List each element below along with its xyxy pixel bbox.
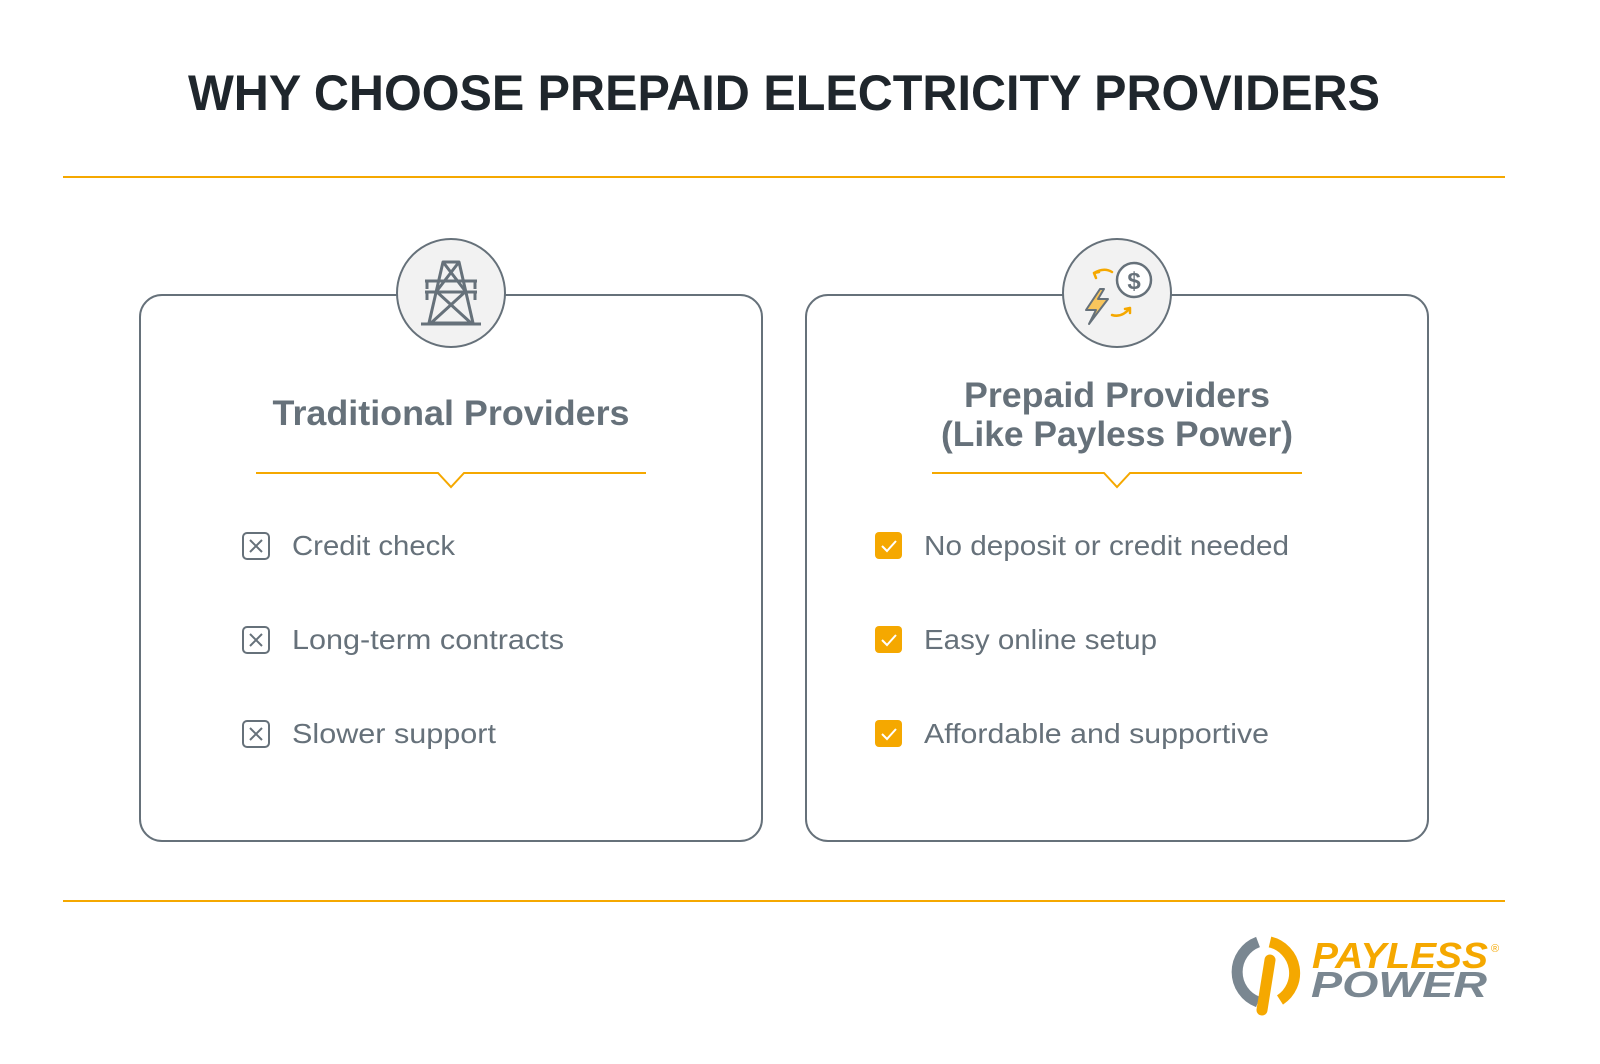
list: benefits: Easy online setup [924, 624, 1157, 655]
heading: Traditional Providers: Traditional Providers [272, 394, 630, 433]
list: cons: Credit check [292, 530, 456, 561]
icon: power tower [397, 239, 505, 347]
heading: Prepaid Providers: Prepaid Providers [964, 376, 1270, 415]
list: cons [243, 530, 564, 749]
logo: Payless Power: PAYLESS [1312, 935, 1488, 976]
panel: prepaid providers: (Like Payless Power) [941, 415, 1293, 454]
logo: Payless Power: POWER [1311, 964, 1487, 1005]
icon: lightning and dollar: $ [1127, 268, 1141, 295]
list: benefits: No deposit or credit needed [924, 530, 1289, 561]
list: cons: Slower support [292, 718, 496, 749]
panel: traditional providers [140, 239, 762, 841]
list: benefits: Affordable and supportive [924, 718, 1269, 749]
panel: prepaid providers [806, 239, 1428, 841]
list: cons: Long-term contracts [292, 624, 564, 655]
logo: Payless Power [1237, 935, 1499, 1010]
title: WHY CHOOSE PREPAID ELECTRICITY PROVIDERS [188, 65, 1380, 121]
icon: lightning and dollar [1063, 239, 1171, 347]
logo: Payless Power: ® [1491, 943, 1499, 955]
list: benefits [875, 530, 1289, 749]
